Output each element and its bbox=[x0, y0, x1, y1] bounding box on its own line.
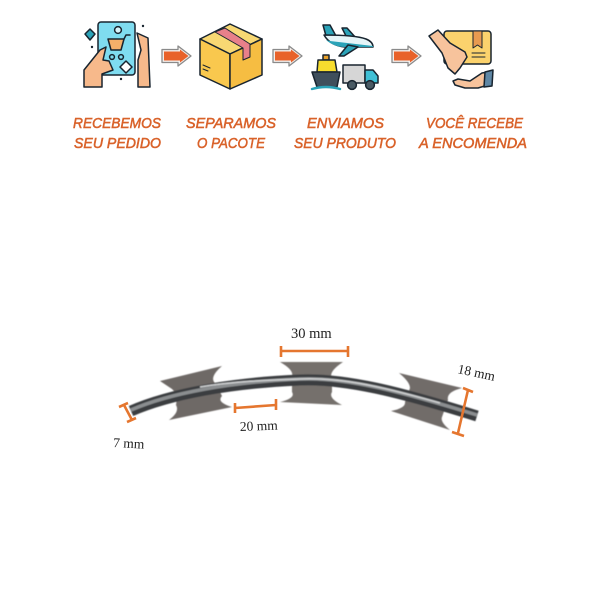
package bbox=[444, 31, 491, 64]
label: recebemos seu pedido bbox=[73, 115, 161, 152]
wire bbox=[131, 380, 477, 416]
label: recebemos seu pedido: RECEBEMOS bbox=[73, 115, 161, 132]
label: você recebe a encomenda: VOCÊ RECEBE bbox=[426, 115, 524, 132]
upper hand bbox=[429, 30, 467, 74]
icon: cardboard box bbox=[200, 24, 262, 89]
sparkles bbox=[85, 25, 144, 80]
right hand bbox=[137, 33, 150, 87]
icon: hands receiving package bbox=[429, 30, 493, 88]
shopping cart bbox=[108, 27, 130, 59]
phone screen bbox=[98, 22, 135, 75]
dimension: 30 mm bbox=[281, 326, 348, 357]
arrow 1 bbox=[162, 46, 191, 66]
icon: plane, ship and truck bbox=[312, 25, 378, 89]
dimension: 18 mm: 18 mm bbox=[456, 361, 497, 384]
left hand bbox=[84, 47, 113, 87]
label: você recebe a encomenda bbox=[418, 115, 527, 152]
left barb bbox=[160, 366, 232, 420]
lower hand bbox=[453, 72, 488, 88]
dimension: 30 mm: 30 mm bbox=[291, 326, 332, 342]
right barb bbox=[391, 373, 462, 430]
dimension: 7 mm bbox=[113, 403, 145, 452]
dimension: 7 mm: 7 mm bbox=[113, 435, 145, 452]
label: enviamos seu produto: SEU PRODUTO bbox=[294, 135, 396, 152]
label: separamos o pacote: O PACOTE bbox=[197, 135, 266, 152]
dimension: 20 mm: 20 mm bbox=[240, 418, 278, 434]
icon: phone with shopping cart held in hands bbox=[84, 22, 150, 87]
dimension: 18 mm bbox=[452, 361, 497, 436]
centre barb bbox=[280, 362, 343, 405]
arrow 3 bbox=[392, 46, 421, 66]
sleeve cuff bbox=[484, 70, 493, 87]
dimension: 20 mm bbox=[235, 399, 278, 434]
packing tape bbox=[215, 28, 250, 60]
plane bbox=[323, 25, 373, 56]
step labels bbox=[73, 115, 527, 152]
truck bbox=[343, 65, 378, 89]
arrow 2 bbox=[273, 46, 302, 66]
label: recebemos seu pedido: SEU PEDIDO bbox=[74, 135, 161, 152]
label: enviamos seu produto: ENVIAMOS bbox=[307, 115, 384, 132]
razor wire photo bbox=[131, 362, 477, 430]
ship bbox=[312, 55, 340, 89]
label: enviamos seu produto bbox=[294, 115, 396, 152]
label: você recebe a encomenda: A ENCOMENDA bbox=[418, 135, 527, 152]
label: separamos o pacote: SEPARAMOS bbox=[186, 115, 276, 132]
label: separamos o pacote bbox=[186, 115, 276, 152]
